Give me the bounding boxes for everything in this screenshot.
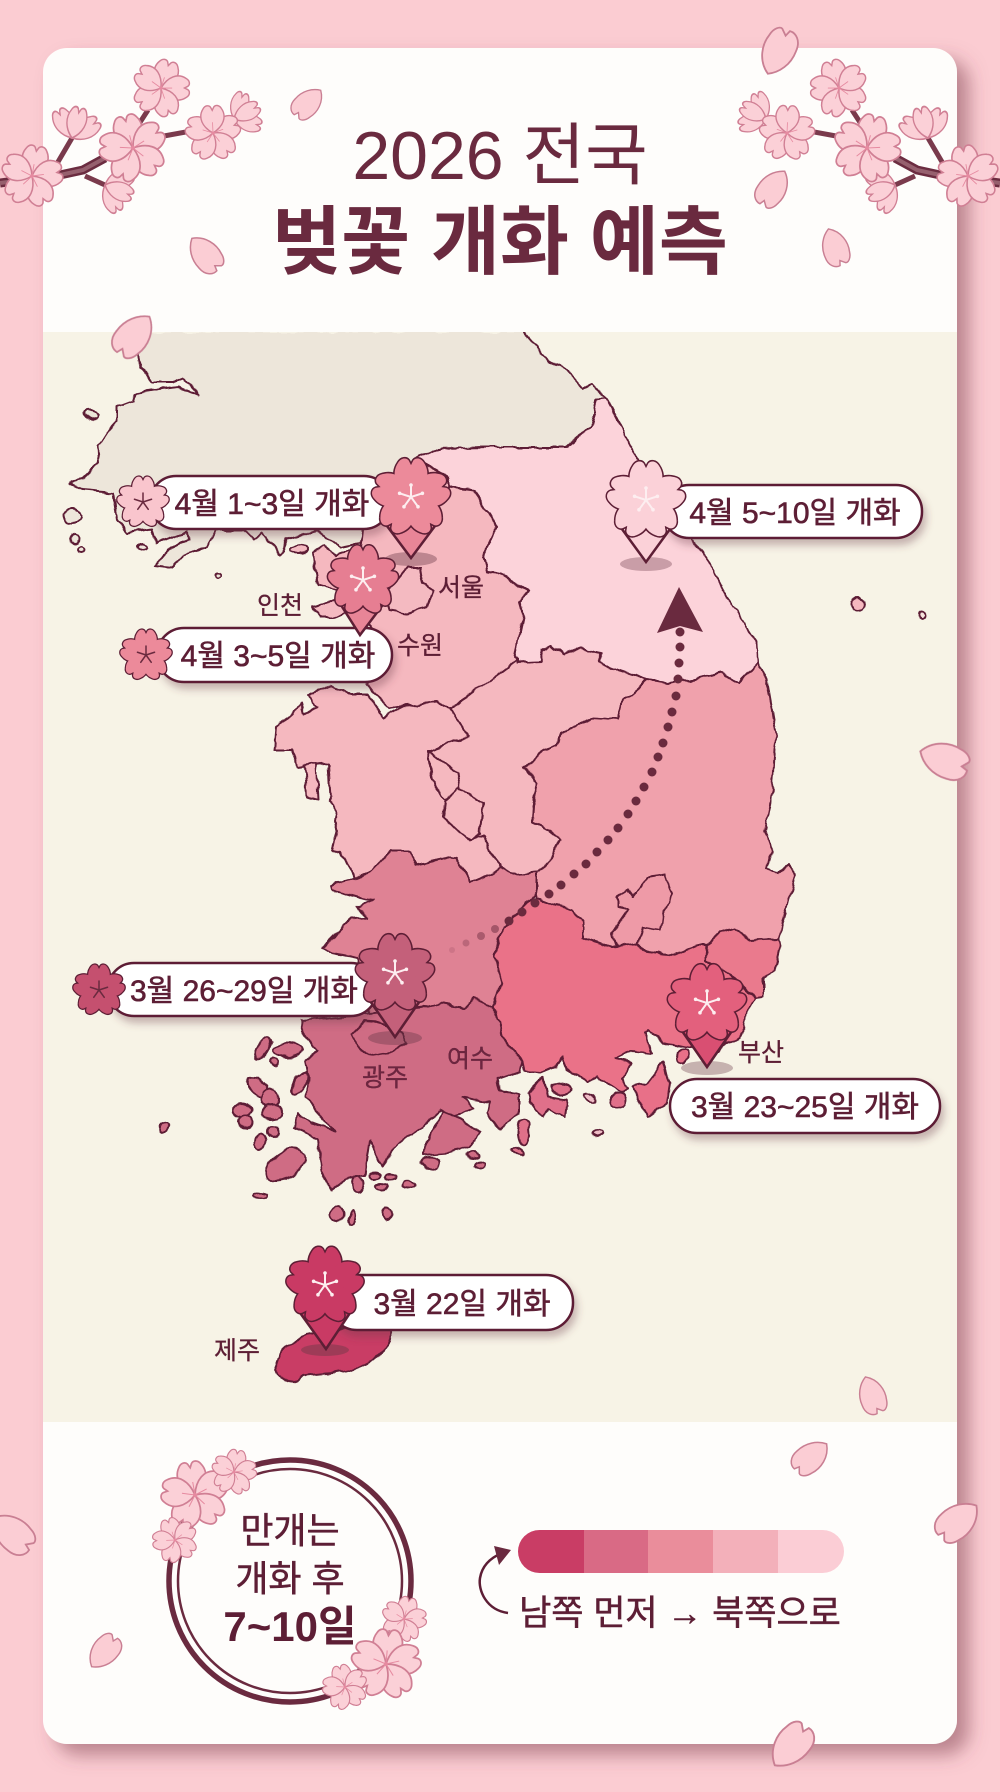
badge: full bloom timing: [145, 1446, 433, 1716]
region: Gangwon: [417, 396, 758, 683]
label: Jeju: 제주: [214, 1337, 260, 1365]
badge: full bloom timing: 7~10일: [223, 1603, 357, 1650]
callout: Apr 5-10: 4월 5~10일 개화: [689, 497, 901, 530]
callout: Mar 26-29: [72, 963, 377, 1017]
region: Daegu: [612, 875, 672, 947]
region: Jeonnam: [295, 998, 523, 1190]
map of Korea: [63, 332, 926, 1382]
pin: Gangwon: [604, 461, 688, 571]
legend text: 남쪽 먼저 → 북쪽으로: [519, 1594, 841, 1633]
pin: Incheon / Suwon area: [326, 546, 400, 635]
callout: Apr 1-3: 4월 1~3일 개화: [175, 488, 369, 521]
callout: Mar 23-25: 3월 23~25일 개화: [691, 1091, 919, 1124]
label: Busan: 부산: [738, 1039, 784, 1067]
region: Gyeonggi: [313, 463, 530, 708]
region: Ulsan: [707, 928, 780, 998]
panel: map background: [43, 332, 957, 1422]
pin: Seoul area: [369, 458, 453, 566]
title: [272, 118, 728, 284]
label: Incheon: 인천: [257, 592, 303, 620]
callout: Mar 23-25: [670, 1079, 940, 1133]
region: Gyeongnam: [492, 898, 755, 1092]
region: Seoul: [387, 568, 433, 613]
badge: full bloom timing: 만개는: [240, 1510, 340, 1551]
region: North Korea: [70, 332, 605, 567]
legend: colour gradient bar: [518, 1530, 844, 1573]
pin: Jeju: [284, 1247, 366, 1356]
label: Seoul: 서울: [438, 574, 484, 602]
callout: Apr 1-3: [116, 476, 390, 529]
pin: Jeonbuk / Gwangju: [353, 934, 437, 1045]
region: Chungnam: [275, 685, 500, 882]
title line: forecast: 벚꽃 개화 예측: [272, 200, 728, 284]
region: Geoje island: [632, 1062, 670, 1117]
label: Gwangju: 광주: [362, 1064, 408, 1092]
place names: [214, 574, 784, 1365]
label: Suwon: 수원: [397, 632, 443, 660]
region: Sejong: [427, 750, 460, 800]
region: Daejeon: [443, 788, 483, 840]
region: Chungbuk: [427, 645, 647, 875]
islands: south-west: [158, 1035, 688, 1224]
region: Gwangju: [352, 1022, 407, 1055]
arrow: route head: [657, 587, 703, 633]
arrow: curved legend arrow: [480, 1546, 511, 1613]
callout: Mar 26-29: 3월 26~29일 개화: [130, 975, 358, 1008]
region: coastal strip: [305, 764, 318, 800]
pin: Busan: [665, 964, 749, 1075]
label: Yeosu: 여수: [447, 1045, 493, 1073]
region: Incheon: [313, 600, 347, 617]
badge: full bloom timing: 개화 후: [235, 1558, 345, 1599]
title line: year and nationwide: 2026 전국: [352, 118, 648, 194]
dotted route from south to north: [449, 628, 684, 953]
callout: Apr 3-5: 4월 3~5일 개화: [181, 640, 375, 673]
region: Goheung peninsula: [423, 1112, 480, 1155]
callout: Mar 22: 3월 22일 개화: [373, 1288, 551, 1321]
callout: Apr 5-10: [663, 485, 922, 538]
region: Jeonbuk: [323, 852, 537, 1017]
islands: north-west: [63, 409, 926, 620]
icon: left cherry branch: [0, 52, 270, 220]
region: Namhae island: [528, 1078, 567, 1118]
region: Jeju: [276, 1327, 392, 1382]
callout: Mar 22: [330, 1275, 573, 1330]
callout: Apr 3-5: [119, 628, 392, 682]
icon: right cherry branch: [730, 52, 1000, 220]
region: Gyeongbuk: [525, 662, 795, 955]
